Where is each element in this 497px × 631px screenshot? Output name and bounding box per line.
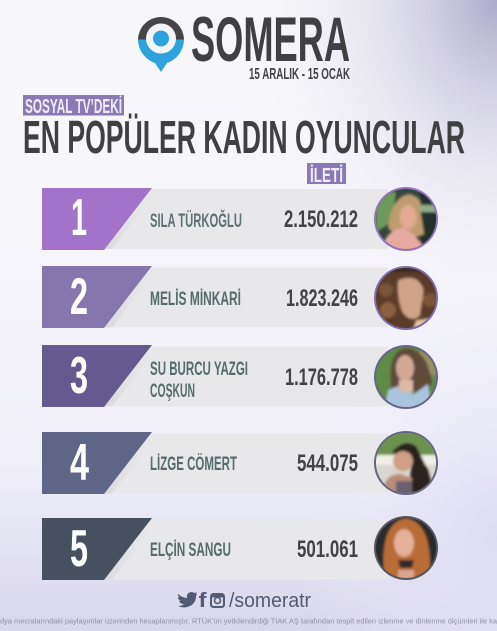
row 1 rank number: 1 [71, 189, 87, 247]
row 5 avatar [374, 516, 438, 580]
row 4 value: 544.075 [297, 450, 358, 477]
row 2 rank badge [42, 266, 152, 328]
row 3 rank badge [42, 345, 152, 407]
icon: Somera logo pin [138, 16, 184, 72]
row 3 value: 1.176.778 [285, 364, 358, 391]
column tag: İleti: İLETİ [310, 164, 343, 187]
row 5 rank number: 5 [70, 520, 88, 578]
row 3 bar [104, 346, 388, 406]
row 4 bar [104, 434, 388, 494]
row 5 value: 501.061 [297, 536, 358, 563]
row 5 bar [104, 520, 388, 580]
row 2 diagonal shadow [104, 268, 160, 328]
row 5 [42, 516, 438, 580]
row 4 avatar [374, 431, 438, 495]
row 5 rank badge [42, 518, 152, 580]
row 5 name: ELÇİN SANGU [150, 540, 231, 561]
row 2 name: MELİS MİNKARİ [150, 289, 241, 310]
social links [178, 590, 311, 612]
row 1 avatar [374, 187, 438, 252]
icon: twitter [178, 592, 197, 608]
row 4 rank badge [42, 432, 152, 494]
row 4 [42, 431, 438, 495]
row 1 name: SILA TÜRKOĞLU [150, 210, 242, 232]
date range: 15 ARALIK - 15 OCAK [249, 66, 350, 83]
row 1 rank badge [42, 188, 152, 250]
row 1 [42, 187, 438, 252]
row 3 [42, 345, 438, 410]
icon: facebook: f [198, 590, 207, 612]
row 3 avatar [374, 345, 438, 410]
row 1 diagonal shadow [104, 189, 160, 249]
row 1 bar [104, 189, 388, 249]
row 2 rank number: 2 [70, 268, 88, 326]
row 2 value: 1.823.246 [286, 285, 358, 312]
row 4 diagonal shadow [104, 434, 160, 494]
row 4 name: LİZGE CÖMERT [150, 454, 237, 475]
column tag: İleti [307, 163, 346, 187]
row 2 bar [104, 268, 388, 328]
row 3 diagonal shadow [104, 346, 160, 406]
subtitle tag [23, 95, 124, 118]
row 2 avatar [374, 266, 438, 332]
row 3 rank number: 3 [70, 347, 88, 405]
row 4 rank number: 4 [70, 434, 89, 492]
logo wordmark: SOMERA [191, 5, 350, 75]
footnote: dya mecralarındaki paylaşımlar üzerinden hesaplanmıştır, RTÜK'ün yetkilendirdiği TİAK AŞ tarafından tespit edilen izlenme ve dinlenme ölçümleri ile ka [0, 616, 497, 626]
subtitle tag: SOSYAL TV’DEKİ [25, 95, 122, 118]
row 3 name second line: COŞKUN [150, 381, 195, 402]
row 2 [42, 266, 438, 332]
icon: instagram [211, 594, 224, 607]
row 1 value: 2.150.212 [284, 206, 358, 233]
row 5 diagonal shadow [104, 520, 160, 580]
row 3 name: SU BURCU YAZGI [150, 359, 248, 380]
social handle: /someratr [229, 590, 311, 612]
